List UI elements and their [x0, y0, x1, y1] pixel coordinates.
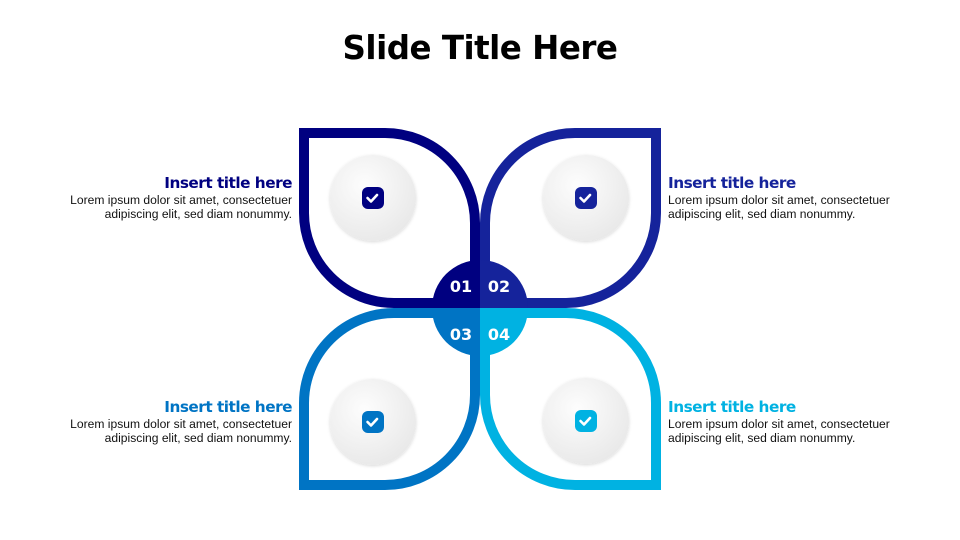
center number circle: 01: [450, 277, 472, 296]
text: item 1: adipiscing elit, sed diam nonummy.: [105, 207, 292, 221]
text: item 4: [668, 398, 890, 445]
text: item 2: Lorem ipsum dolor sit amet, consectetuer: [668, 193, 890, 207]
icon 3: [330, 379, 416, 465]
center number circle: 03: [450, 325, 472, 344]
text: item 1: Insert title here: [164, 174, 292, 192]
petal 2: [485, 133, 656, 303]
petal 1: [304, 133, 475, 303]
text: item 3: adipiscing elit, sed diam nonummy.: [105, 431, 292, 445]
text: item 2: [668, 174, 890, 221]
text: item 1: Lorem ipsum dolor sit amet, consectetuer: [70, 193, 292, 207]
title: Slide Title Here: [343, 29, 617, 67]
text: item 2: Insert title here: [668, 174, 796, 192]
icon 1: [330, 155, 416, 241]
text: item 4: Lorem ipsum dolor sit amet, consectetuer: [668, 417, 890, 431]
icon 2: [543, 155, 629, 241]
center number circle: 02: [488, 277, 510, 296]
text: item 3: [70, 398, 292, 445]
center number circle: 04: [488, 325, 510, 344]
text: item 3: Lorem ipsum dolor sit amet, consectetuer: [70, 417, 292, 431]
text: item 1: [70, 174, 292, 221]
petal 3: [304, 313, 475, 485]
petal 4: [485, 313, 656, 485]
center number circle: [432, 260, 528, 356]
text: item 4: adipiscing elit, sed diam nonummy.: [668, 431, 855, 445]
text: item 2: adipiscing elit, sed diam nonummy.: [668, 207, 855, 221]
text: item 4: Insert title here: [668, 398, 796, 416]
text: item 3: Insert title here: [164, 398, 292, 416]
icon 4: [543, 378, 629, 464]
